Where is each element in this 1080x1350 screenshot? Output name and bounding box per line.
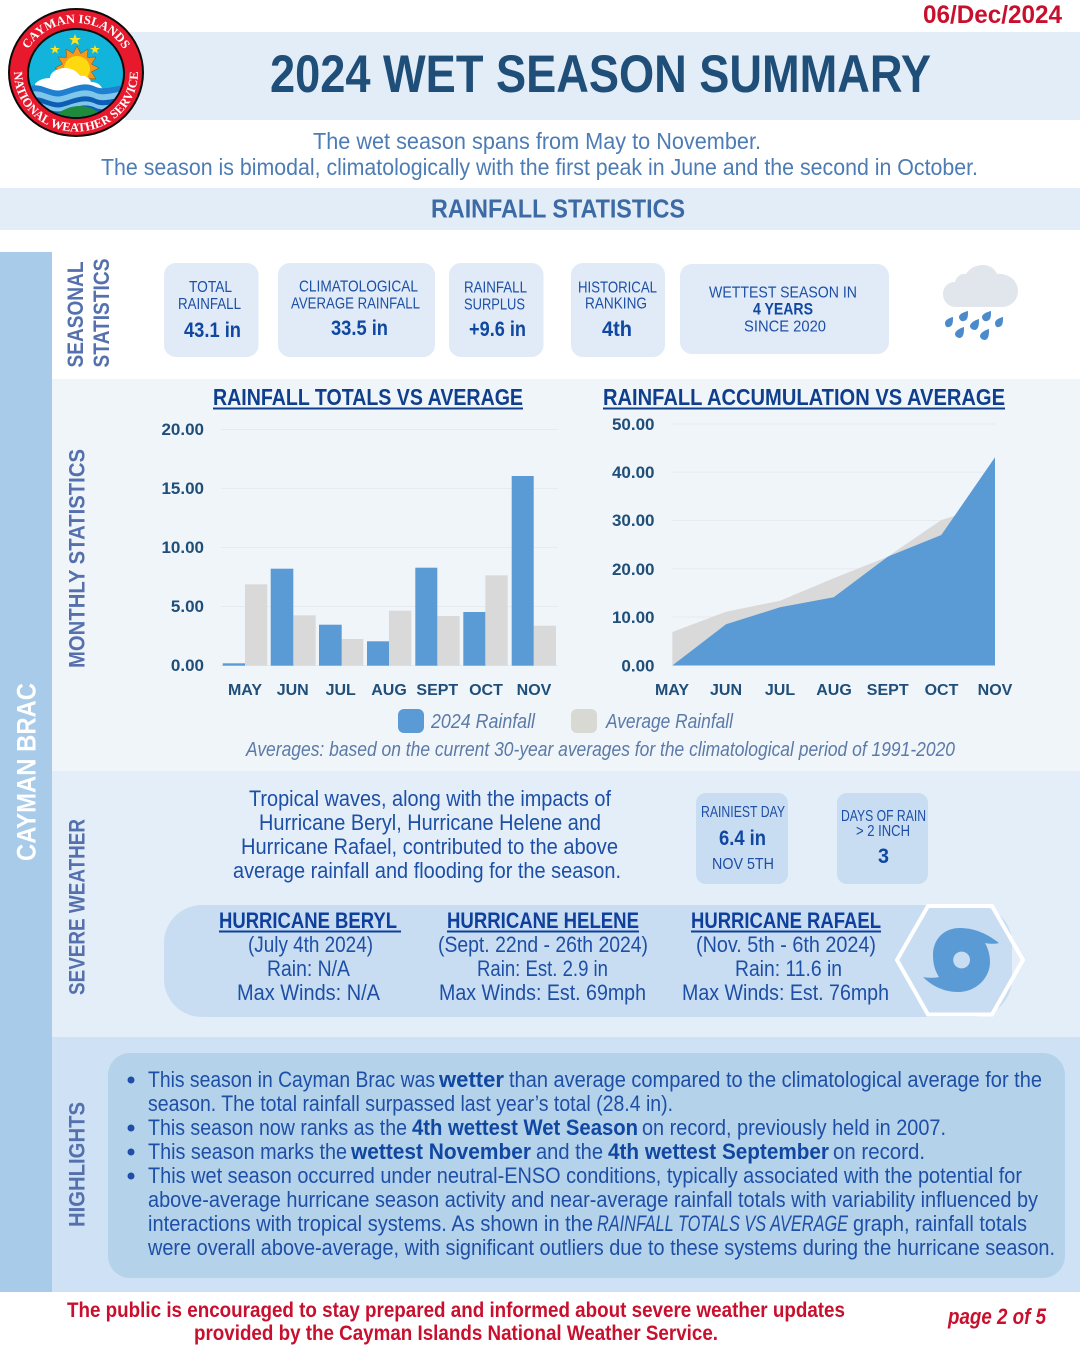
hurricane Beryl: Rain: N/A [267, 956, 350, 981]
highlight: ENSO conditions: graph, rainfall totals [853, 1211, 1027, 1236]
hurricane Rafael: (Nov. 5th - 6th 2024) [696, 932, 876, 957]
bar chart: rainfall totals vs average: SEPT [416, 682, 458, 699]
bar chart: rainfall totals vs average: 10.00 [161, 538, 204, 557]
section background: severe weather [52, 771, 1080, 1037]
bar chart: rainfall totals vs average: JUL [326, 682, 356, 699]
severe weather summary text: average rainfall and flooding for the season. [233, 858, 621, 883]
area chart: rainfall accumulation vs average: JUN [710, 682, 742, 699]
bar chart: rainfall totals vs average: NOV [517, 682, 552, 699]
stat card: historical ranking [571, 263, 665, 357]
section label: seasonal statistics: STATISTICS [89, 258, 114, 368]
severe weather summary text: Tropical waves, along with the impacts of [249, 786, 612, 811]
area chart: rainfall accumulation vs average: JUL [765, 682, 795, 699]
left strip: Cayman Brac: CAYMAN BRAC [12, 683, 42, 861]
icon: rain cloud [943, 265, 1018, 340]
stat card: total rainfall: TOTAL [189, 279, 232, 296]
area chart: rainfall accumulation vs average: 0.00 [621, 656, 654, 676]
hurricane Beryl: (July 4th 2024) [248, 932, 373, 957]
hurricane Helene: Rain: Est. 2.9 in [477, 956, 608, 981]
stat card: rainiest day [696, 793, 788, 884]
stat card: climatological average [278, 263, 435, 357]
stat card: climatological average: 33.5 in [331, 317, 388, 340]
area chart: rainfall accumulation vs average: OCT [925, 682, 959, 699]
stat card: wettest season [680, 264, 889, 354]
stat card: rainfall surplus: +9.6 in [469, 318, 526, 341]
page number: page 2 of 5 [947, 1304, 1047, 1329]
bar chart: rainfall totals vs average [161, 420, 558, 699]
severe weather summary text: Hurricane Beryl, Hurricane Helene and [259, 810, 601, 835]
section background: highlights [52, 1037, 1080, 1292]
icon: hurricane in hexagon [897, 906, 1023, 1014]
section label: seasonal statistics [63, 258, 114, 368]
highlight: wetter than average: season. The total rainfall surpassed last year’s total (28.4 in). [148, 1091, 673, 1116]
section label: highlights: HIGHLIGHTS [64, 1102, 90, 1227]
highlight: ranking: 4th wettest Wet Season [412, 1115, 638, 1140]
stat card: days of rain: 3 [878, 845, 889, 868]
highlight: wetter than average: than average compared to the climatological average for the [509, 1067, 1042, 1092]
area chart: rainfall accumulation vs average: 20.00 [612, 560, 654, 579]
highlight: wettest months: on record. [833, 1139, 925, 1164]
chart legend [398, 709, 733, 733]
hurricane Beryl: HURRICANE BERYL [219, 908, 397, 933]
highlight: ENSO conditions: RAINFALL TOTALS VS AVERAGE [597, 1211, 848, 1236]
highlight: ranking: This season now ranks as the [148, 1115, 407, 1140]
highlight: wetter than average: This season in Cayman Brac was [148, 1067, 435, 1092]
highlight: wettest months: and the [536, 1139, 603, 1164]
chart legend: 2024 Rainfall [430, 711, 535, 733]
highlight: wettest months: This season marks the [148, 1139, 347, 1164]
heading: rainfall accumulation vs average: RAINFALL ACCUMULATION VS AVERAGE [603, 384, 1005, 410]
section label: severe weather: SEVERE WEATHER [64, 819, 90, 995]
logo: Cayman Islands National Weather Service [8, 8, 144, 137]
area chart: rainfall accumulation vs average: 50.00 [612, 415, 654, 434]
stat card: wettest season: 4 YEARS [753, 300, 813, 318]
footer message [67, 1299, 845, 1345]
stat card: climatological average: CLIMATOLOGICAL [299, 278, 418, 296]
area chart: rainfall accumulation vs average: 10.00 [612, 608, 654, 627]
hurricane Rafael: Max Winds: Est. 76mph [682, 980, 889, 1005]
bar chart: rainfall totals vs average: 15.00 [161, 479, 204, 498]
stat card: wettest season: WETTEST SEASON IN [709, 284, 857, 302]
heading: rainfall totals vs average: RAINFALL TOTALS VS AVERAGE [213, 384, 523, 410]
intro text: The wet season spans from May to November. [313, 128, 761, 154]
area chart: rainfall accumulation vs average [612, 415, 1013, 699]
intro text: The season is bimodal, climatologically with the first peak in June and the second in October. [101, 154, 978, 180]
hurricane Helene: (Sept. 22nd - 26th 2024) [438, 932, 648, 957]
stat card: wettest season: SINCE 2020 [744, 318, 826, 336]
area chart: rainfall accumulation vs average: 40.00 [612, 463, 654, 482]
left strip: Cayman Brac [0, 252, 52, 1292]
stat card: total rainfall [164, 263, 258, 357]
highlight: wetter than average: wetter [438, 1067, 504, 1092]
stat card: total rainfall: RAINFALL [178, 296, 241, 313]
area chart: rainfall accumulation vs average: NOV [978, 682, 1013, 699]
hurricane Rafael [682, 908, 889, 1005]
footer message: provided by the Cayman Islands National Weather Service. [194, 1322, 718, 1345]
averages note: Averages: based on the current 30-year averages for the climatological period of 1991-2020 [245, 739, 955, 761]
stat card: historical ranking: 4th [602, 318, 632, 341]
chart legend: Average Rainfall [605, 711, 733, 733]
footer message: The public is encouraged to stay prepared and informed about severe weather updates [67, 1299, 845, 1322]
severe weather summary text: Hurricane Rafael, contributed to the above [241, 834, 618, 859]
hurricane Rafael: Rain: 11.6 in [735, 956, 842, 981]
stat card: historical ranking: RANKING [585, 296, 647, 312]
date: 06/Dec/2024 [923, 1, 1062, 29]
area chart: rainfall accumulation vs average: SEPT [867, 682, 909, 699]
stat card: rainiest day: RAINIEST DAY [701, 804, 785, 821]
stat card: days of rain [837, 793, 928, 884]
area chart: rainfall accumulation vs average: MAY [655, 682, 689, 699]
stat card: historical ranking: HISTORICAL [578, 280, 657, 296]
hurricane Helene: Max Winds: Est. 69mph [439, 980, 646, 1005]
logo: Cayman Islands National Weather Service: CAYMAN ISLANDS [23, 14, 130, 48]
hurricane Helene: HURRICANE HELENE [447, 908, 639, 933]
highlight: wettest months: 4th wettest September [608, 1139, 829, 1164]
area chart: rainfall accumulation vs average: AUG [816, 682, 852, 699]
hurricane Beryl: Max Winds: N/A [237, 980, 380, 1005]
rainfall statistics heading band: RAINFALL STATISTICS [431, 194, 685, 224]
section label: monthly statistics: MONTHLY STATISTICS [64, 449, 90, 668]
logo: Cayman Islands National Weather Service: NATIONAL WEATHER SERVICE [14, 71, 138, 132]
stat card: rainfall surplus: SURPLUS [464, 296, 525, 314]
area chart: rainfall accumulation vs average: 30.00 [612, 511, 654, 530]
title: 2024 WET SEASON SUMMARY [270, 45, 931, 104]
rainfall statistics heading band [0, 188, 1080, 230]
stat card: total rainfall: 43.1 in [184, 319, 241, 342]
highlight bullets [128, 1076, 134, 1180]
stat card: rainiest day: NOV 5TH [712, 856, 774, 873]
intro text [101, 128, 978, 180]
hurricane Helene [438, 908, 648, 1005]
severe weather summary text [233, 786, 621, 883]
stat card: climatological average: AVERAGE RAINFALL [291, 296, 420, 312]
section background: monthly [52, 379, 1080, 771]
panel: highlights [108, 1053, 1065, 1278]
hurricane Beryl [219, 908, 401, 1005]
highlight: wettest months [148, 1139, 925, 1164]
title band [125, 32, 1080, 120]
highlight: wetter than average [148, 1067, 1042, 1116]
section label: seasonal statistics: SEASONAL [63, 262, 88, 368]
stat card: rainfall surplus [449, 263, 544, 357]
bar chart: rainfall totals vs average: 0.00 [171, 656, 204, 675]
bar chart: rainfall totals vs average: AUG [371, 682, 407, 699]
bar chart: rainfall totals vs average: JUN [277, 682, 309, 699]
highlight: wettest months: wettest November [350, 1139, 531, 1164]
stat card: rainfall surplus: RAINFALL [464, 280, 527, 296]
stat card: days of rain: DAYS OF RAIN [841, 808, 926, 825]
stat card: days of rain: > 2 INCH [856, 823, 910, 840]
stat card: rainiest day: 6.4 in [719, 827, 766, 850]
highlight: ENSO conditions: interactions with tropical systems. As shown in the [148, 1211, 593, 1236]
highlight: ENSO conditions [147, 1163, 1055, 1260]
panel: hurricanes [164, 905, 1012, 1017]
bar chart: rainfall totals vs average: MAY [228, 682, 262, 699]
highlight: ranking [148, 1115, 946, 1140]
bar chart: rainfall totals vs average: 5.00 [171, 597, 204, 616]
hurricane Rafael: HURRICANE RAFAEL [691, 908, 881, 933]
bar chart: rainfall totals vs average: 20.00 [161, 420, 204, 439]
highlight: ranking: on record, previously held in 2007. [642, 1115, 946, 1140]
bar chart: rainfall totals vs average: OCT [469, 682, 503, 699]
